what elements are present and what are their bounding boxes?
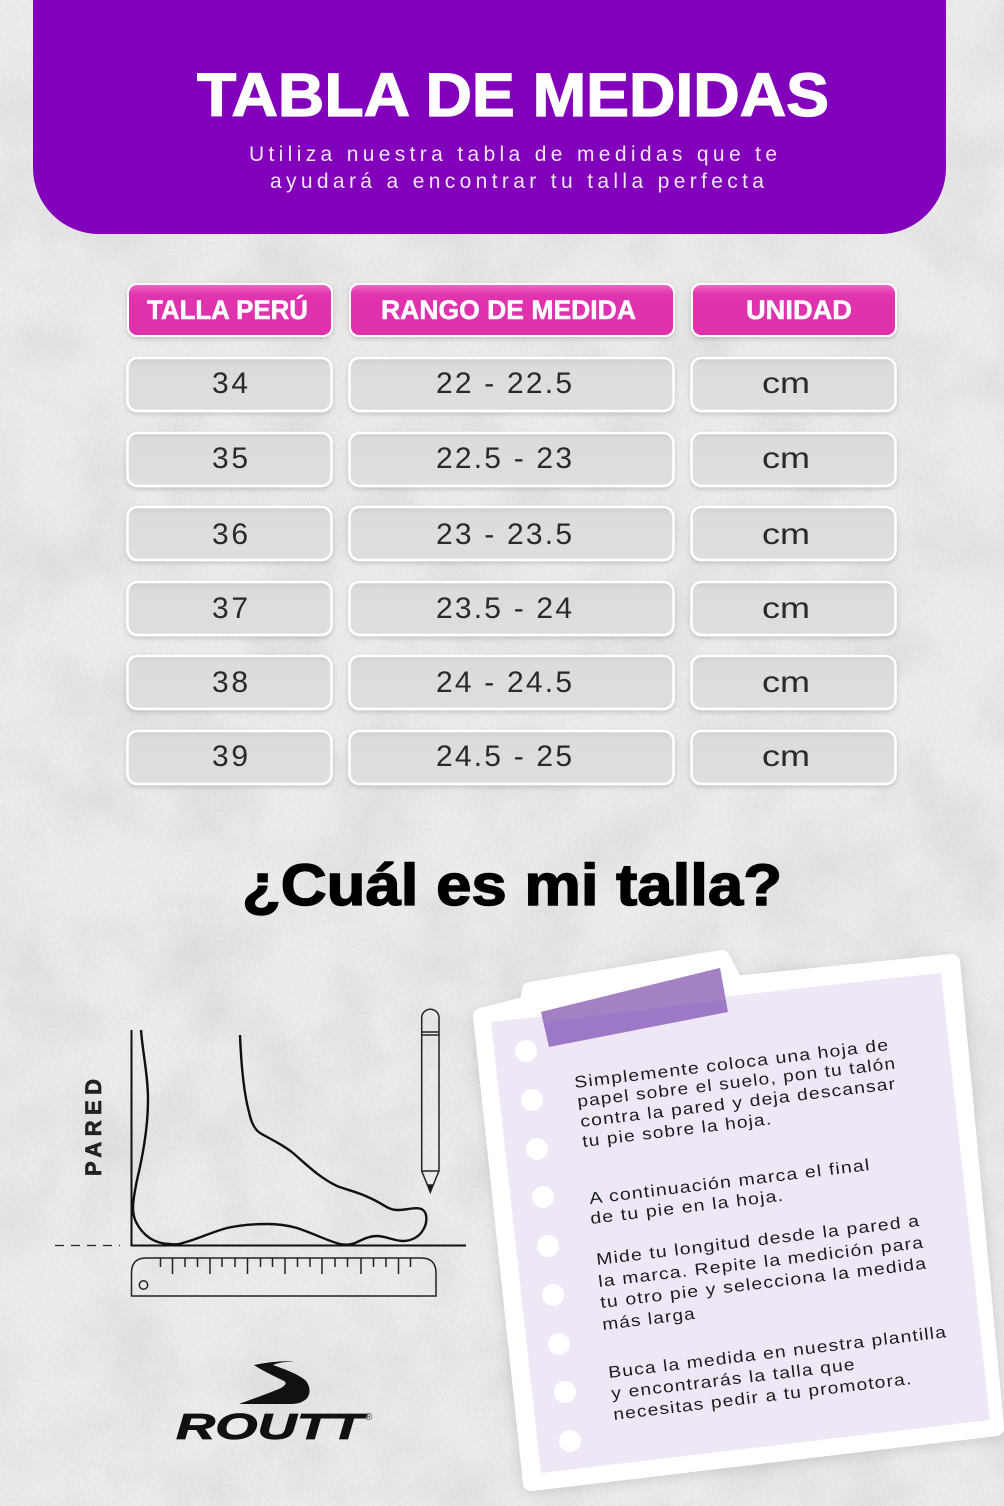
binder holes [515,1040,581,1452]
ruler [132,1258,436,1296]
size table [128,284,896,784]
row 38: 24 - 24.5 [436,666,572,699]
registered mark: ® [365,1412,373,1423]
row 34: 22 - 22.5 [436,367,572,400]
note step 1: contra la pared y deja descansar [579,1075,897,1131]
row 38 [128,656,896,709]
panel: purple header [33,0,946,234]
wordmark: ROUTT [176,1406,368,1447]
note step 3: la marca. Repite la medición para [597,1234,925,1291]
note step 3: más larga [601,1305,697,1334]
row 36: 23 - 23.5 [436,518,572,551]
header: talla perú: TALLA PERÚ [147,294,308,325]
note step 4: necesitas pedir a tu promotora. [612,1370,913,1424]
note step 1: Simplemente coloca una hoja de [573,1036,890,1092]
row 38: cm [762,666,810,699]
note step 2 [588,1156,871,1228]
dashed line [55,1244,120,1246]
row 36: 36 [212,518,248,551]
tape [541,968,728,1047]
note step 2: de tu pie en la hoja. [589,1187,785,1228]
row 38: 38 [212,666,248,699]
note step 4: y encontrarás la talla que [610,1356,857,1403]
row 37 [128,582,896,635]
foot measuring diagram [55,1009,466,1296]
row 37: 37 [212,592,248,625]
note step 1 [573,1036,897,1151]
paper white backing [481,958,996,1483]
row 36: cm [762,518,810,551]
row 35: 35 [212,442,248,475]
foot outline [133,1030,426,1245]
heading: cuál es mi talla: ¿Cuál es mi talla? [242,853,782,918]
header: unidad: UNIDAD [746,295,852,325]
wall and floor lines [132,1030,466,1246]
row 35: cm [762,442,810,475]
row 37: 23.5 - 24 [436,592,572,625]
row 36 [128,507,896,560]
subtitle line 2: ayudará a encontrar tu talla perfecta [270,170,764,193]
note step 2: A continuación marca el final [588,1156,871,1208]
logo: routt [176,1361,373,1447]
icon: pencil [422,1009,439,1192]
paper lilac sheet [491,973,990,1473]
note step 3: tu otro pie y selecciona la medida [599,1255,928,1312]
note step 1: tu pie sobre la hoja. [581,1110,773,1151]
row 34 [128,358,896,411]
row 37: cm [762,592,810,625]
label: pared: PARED [81,1079,106,1176]
row 34: 34 [212,367,248,400]
icon: swoosh [239,1361,310,1404]
row 39: cm [762,740,810,773]
header: talla perú [128,284,332,336]
panel: note paper [481,958,996,1483]
note step 4 [607,1323,948,1424]
row 35: 22.5 - 23 [436,442,572,475]
subtitle line 1: Utiliza nuestra tabla de medidas que te [249,143,777,166]
note step 1: papel sobre el suelo, pon tu talón [576,1055,897,1111]
note step 4: Buca la medida en nuestra plantilla [607,1323,948,1382]
row 39: 39 [212,740,248,773]
row 39 [128,731,896,784]
row 35 [128,433,896,486]
header: unidad [692,284,896,336]
row 34: cm [762,367,810,400]
header: rango de medida: RANGO DE MEDIDA [381,295,636,325]
header: rango de medida [350,284,674,336]
title: TABLA DE MEDIDAS [197,61,829,129]
note step 3 [595,1212,928,1334]
row 39: 24.5 - 25 [436,740,572,773]
note step 3: Mide tu longitud desde la pared a [595,1212,921,1269]
